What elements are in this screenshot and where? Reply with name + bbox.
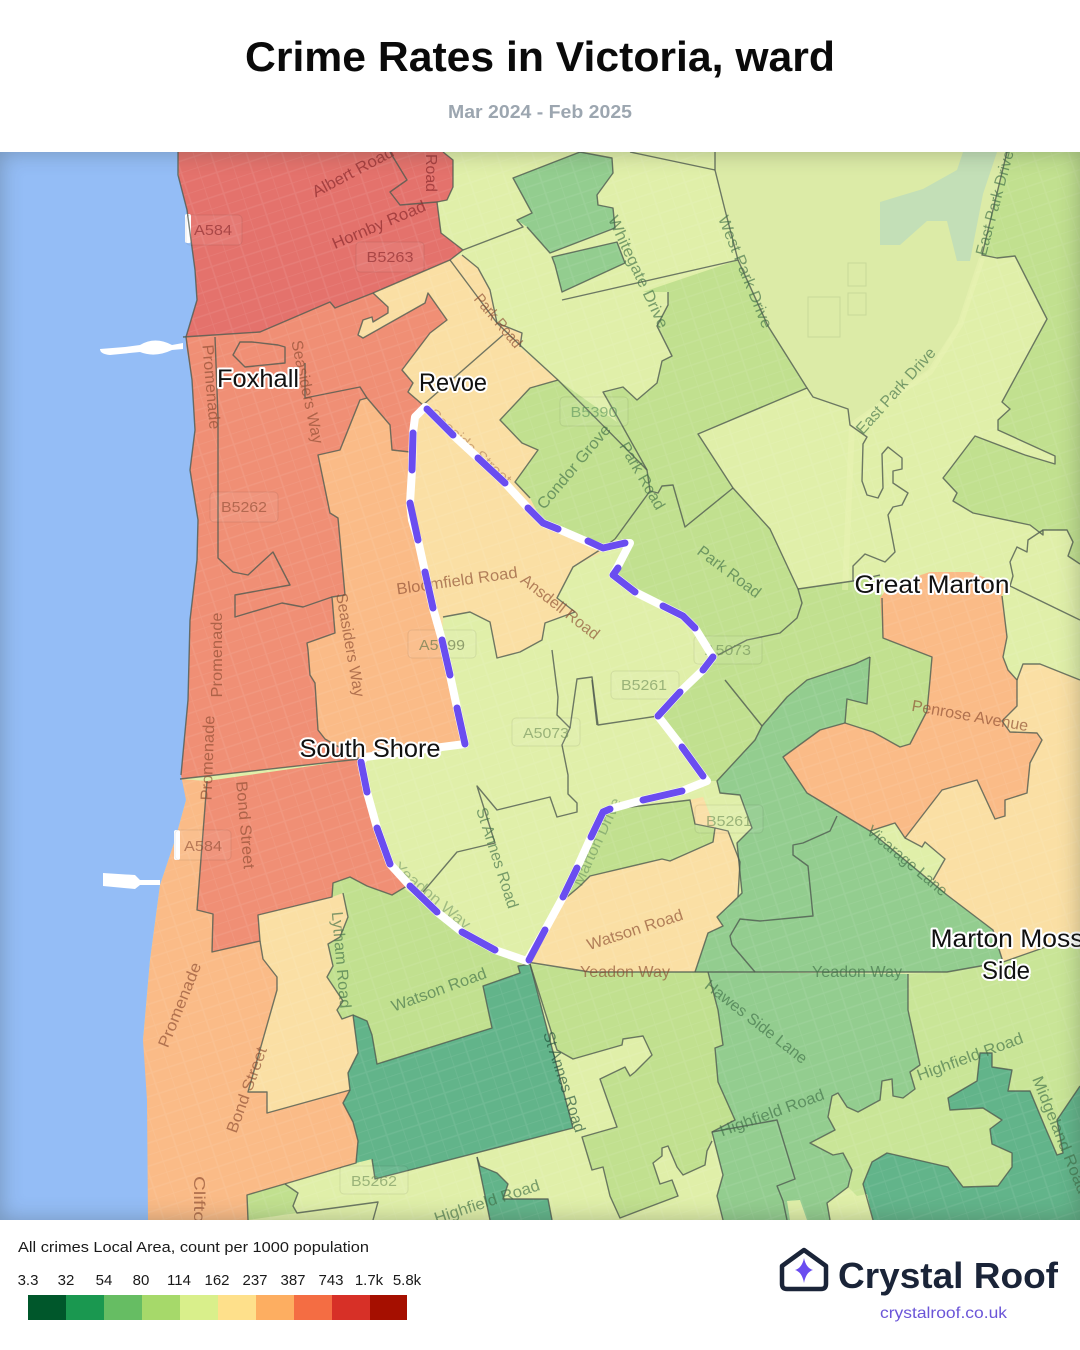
park pitches — [808, 263, 866, 337]
green area road labels: Yeadon Way — [390, 859, 474, 933]
green area road labels: Park Road — [694, 543, 764, 602]
park — [715, 152, 1007, 425]
road labels — [156, 144, 1080, 1234]
salmon and orange road labels: Promenade — [209, 612, 226, 698]
region: north-east light green — [943, 152, 1080, 564]
region: Lytham light orange — [248, 893, 358, 1113]
red area road labels: Road — [422, 154, 439, 192]
legend values: 114 — [167, 1272, 191, 1289]
salmon and orange road labels: Ansdell Road — [517, 571, 602, 643]
region: Hawes Side mid green — [708, 972, 920, 1220]
ward outline: purple dashes — [361, 409, 713, 960]
map: crime choropleth — [0, 152, 1080, 1220]
pier: north — [100, 340, 183, 355]
green area road labels: Watson Road — [389, 965, 489, 1016]
place labels: South Shore — [300, 735, 440, 763]
road number labels: B5263 — [366, 249, 414, 266]
region: orange south-west — [140, 779, 358, 1220]
green area road labels: West Park Drive — [714, 213, 775, 331]
legend values: 3.3 — [18, 1272, 38, 1289]
road number labels: B5390 — [570, 404, 618, 421]
legend title: All crimes Local Area, count per 1000 population — [18, 1239, 369, 1256]
region: South Shore salmon — [197, 759, 407, 952]
region: bottom-left light green — [247, 1184, 298, 1220]
pier: south — [103, 873, 160, 889]
road number labels: A5099 — [419, 637, 465, 654]
salmon and orange road labels: Seasiders Way — [332, 592, 367, 698]
region: Marton orange — [783, 572, 1042, 838]
legend values: 54 — [96, 1272, 112, 1289]
region: Marton light orange — [905, 664, 1080, 962]
green area road labels: Condor Grove — [534, 422, 615, 513]
green area road labels: Park Road — [615, 440, 668, 513]
salmon and orange road labels: Penrose Avenue — [910, 698, 1030, 735]
green area road labels: Highfield Road — [718, 1087, 827, 1140]
East Park Drive road — [845, 258, 982, 590]
salmon and orange road labels: Promenade — [156, 960, 205, 1050]
road number labels: A584 — [194, 222, 232, 239]
green area road labels: Vicarage Lane — [863, 823, 951, 900]
green area road labels: St Annes Road — [539, 1030, 588, 1135]
green area road labels: St Annes Road — [472, 806, 521, 911]
red area road labels — [310, 144, 439, 253]
salmon and orange road labels: Bond Street — [232, 780, 257, 870]
green area road labels: Yeadon Way — [812, 964, 902, 981]
place labels: Marton Moss — [930, 925, 1080, 953]
salmon and orange road labels: Promenade — [198, 344, 223, 430]
legend values: 32 — [58, 1272, 74, 1289]
road number labels: A584 — [184, 838, 222, 855]
green area road labels: Marton Drive — [570, 795, 625, 889]
green area road labels — [328, 149, 1080, 1228]
green area road labels: Highfield Road — [915, 1030, 1026, 1085]
region: south-east light green — [810, 935, 1080, 1220]
region: Park Road light green — [613, 485, 802, 657]
region: Foxhall salmon — [180, 293, 447, 779]
green area road labels: Hawes Side Lane — [701, 977, 810, 1068]
salmon and orange road labels: Seasiders Way — [287, 339, 326, 445]
legend values: 1.7k — [355, 1272, 384, 1289]
road number labels: B5261 — [621, 677, 667, 694]
street texture — [0, 152, 1080, 1220]
legend: colour scale — [18, 1272, 422, 1320]
salmon and orange road labels: Clifton — [190, 1176, 207, 1220]
salmon and orange road labels: Park Road — [470, 291, 525, 352]
salmon and orange road labels: Bloomfield Road — [395, 565, 519, 598]
place labels: Revoe — [419, 369, 487, 397]
icon: house with star — [782, 1250, 826, 1289]
green area road labels: Lytham Road — [328, 911, 353, 1009]
road number labels: A5073 — [523, 725, 569, 742]
legend values: 387 — [280, 1272, 306, 1289]
region: Great Marton mid green — [695, 657, 1003, 972]
legend values: 5.8k — [393, 1272, 422, 1289]
region: Watson light orange — [527, 797, 740, 972]
road number labels — [184, 222, 752, 1190]
legend values: 80 — [133, 1272, 149, 1289]
region: east of route light green — [658, 575, 932, 781]
Victoria ward outline — [361, 407, 713, 961]
region: central north light green — [500, 260, 807, 548]
region: south-east dark green — [863, 1053, 1080, 1220]
logo: Crystal Roof — [780, 1248, 1059, 1322]
green area road labels: Whitegate Drive — [604, 213, 671, 331]
legend values: 237 — [242, 1272, 268, 1289]
region: small yellow pockets — [827, 1187, 873, 1220]
legend values: 743 — [318, 1272, 344, 1289]
region: Revoe light orange — [358, 255, 603, 658]
region: small dark green — [477, 1157, 552, 1220]
place labels — [217, 365, 1080, 985]
road number labels: B5262 — [351, 1173, 397, 1190]
logo url: crystalroof.co.uk — [880, 1305, 1008, 1322]
region: north red — [178, 152, 463, 337]
region: dark green south — [343, 964, 573, 1179]
salmon and orange road labels — [156, 291, 1030, 1234]
road number signs — [175, 215, 763, 1194]
subtitle: date range: Mar 2024 - Feb 2025 — [448, 102, 632, 122]
pond — [880, 152, 997, 261]
place labels: Great Marton — [854, 571, 1010, 599]
road number labels: A5073 — [705, 642, 751, 659]
title: Crime Rates in Victoria, ward — [245, 33, 835, 80]
salmon and orange road labels: Seaside Street — [425, 406, 515, 489]
legend values: 162 — [204, 1272, 230, 1289]
road number labels: B5261 — [706, 813, 752, 830]
regions — [140, 152, 1080, 1220]
region: south-centre light green — [530, 964, 735, 1218]
green area road labels: East Park Drive — [853, 345, 940, 438]
region: B5261 light orange patch — [690, 797, 715, 828]
salmon and orange road labels: Yeadon Way — [580, 964, 670, 981]
salmon and orange road labels: Bond Street — [224, 1044, 271, 1135]
legend values — [18, 1272, 422, 1289]
region: Marton Drive light green — [567, 800, 715, 897]
sea — [0, 152, 198, 1220]
land base — [0, 152, 1080, 1220]
legend swatches — [28, 1295, 407, 1320]
ward outline: white casing — [361, 407, 713, 961]
ward boundaries — [178, 152, 1080, 1220]
place labels: Foxhall — [217, 365, 299, 393]
place labels: Side — [982, 957, 1030, 985]
region: Watson west light green — [327, 877, 527, 1064]
salmon and orange road labels: Promenade — [199, 715, 218, 801]
road number labels: B5262 — [221, 499, 267, 516]
region: orange west-centre — [307, 398, 465, 759]
map edge shadow — [0, 152, 1080, 1220]
coastal white marks — [174, 214, 191, 860]
red area road labels: Hornby Road — [330, 198, 429, 253]
logo wordmark: Crystal Roof — [838, 1255, 1059, 1296]
salmon and orange road labels: Watson Road — [585, 907, 685, 954]
region: top green blocks — [513, 152, 615, 253]
